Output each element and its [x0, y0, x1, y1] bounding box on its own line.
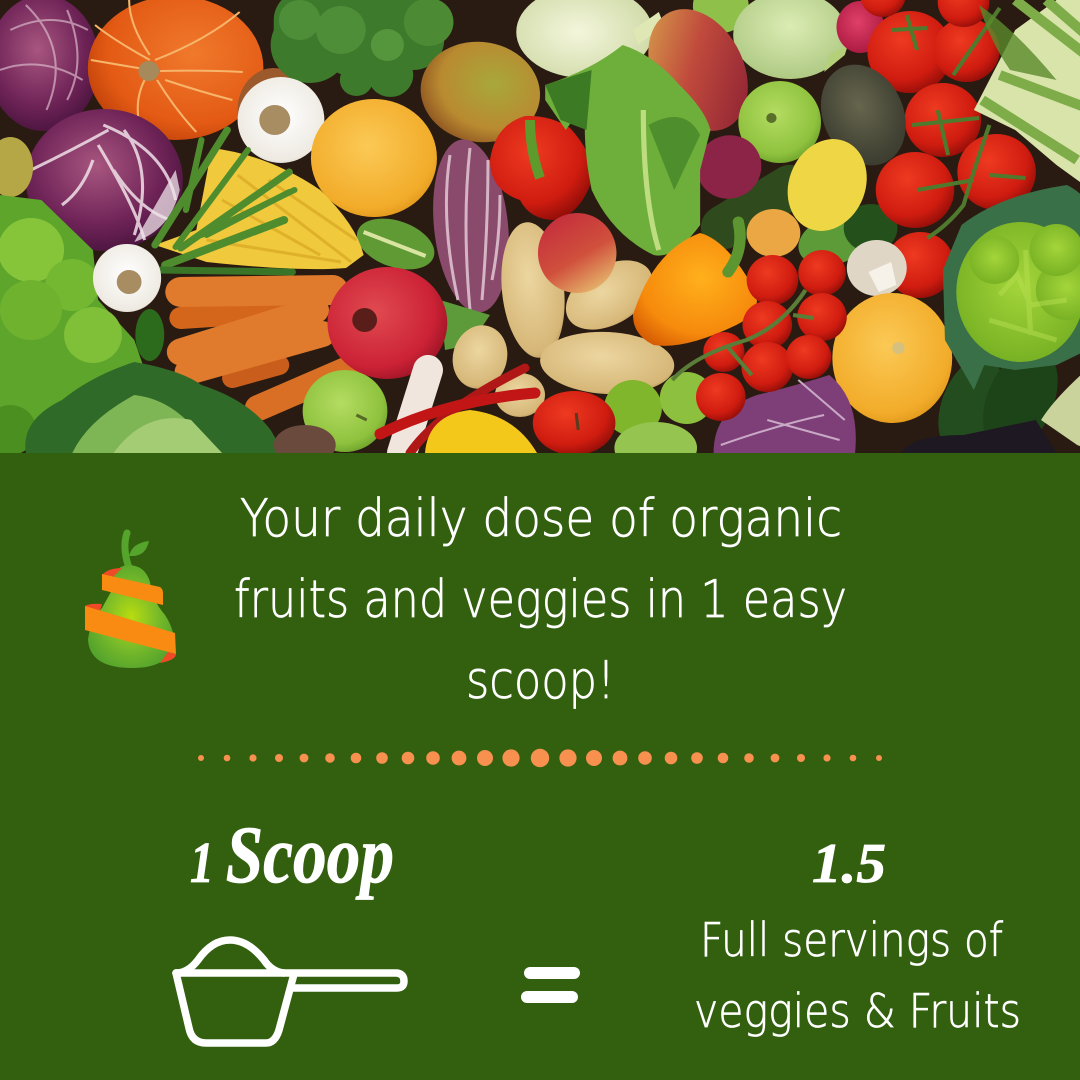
- pomegranate: [327, 267, 447, 379]
- heading: daily dose message: scoop!: [466, 651, 615, 711]
- limes: [604, 372, 714, 436]
- grapefruit: [311, 99, 437, 217]
- root vegetable bottom: [274, 425, 336, 465]
- radish: [836, 1, 884, 53]
- romanesco with leaves: [943, 185, 1080, 390]
- red onion: [685, 124, 773, 210]
- lettuce left: [0, 195, 164, 455]
- dotted divider: [198, 749, 882, 767]
- heading: daily dose message: [234, 489, 847, 711]
- red apple bottom: [533, 391, 615, 455]
- tomatoes top right: [860, 0, 1036, 298]
- white radish: [402, 370, 428, 453]
- fennel bulb top: [516, 0, 664, 78]
- purple radicchio bottom: [714, 375, 856, 453]
- orange bell pepper: [633, 222, 757, 346]
- garlic bulb top: [238, 77, 324, 163]
- kohlrabi: [733, 0, 848, 79]
- chili peppers: [380, 368, 535, 453]
- top lime: [693, 0, 749, 33]
- blush apple: [538, 213, 616, 293]
- vine stem: [672, 290, 814, 380]
- yellow pepper: [425, 410, 537, 453]
- apricot: [747, 209, 800, 257]
- photo: assorted fresh vegetables and fruits: [0, 0, 1080, 453]
- green beans: [155, 130, 294, 272]
- heading: daily dose message: Your daily dose of organic: [240, 489, 842, 549]
- potatoes right: [538, 246, 676, 397]
- tomato vines: [891, 8, 1026, 238]
- green cucumbers in the back: [692, 157, 1072, 463]
- icon: measuring scoop with powder: [176, 940, 404, 1043]
- potatoes left: [446, 219, 571, 417]
- green apple bottom: [303, 370, 387, 452]
- carrots: [181, 290, 346, 408]
- green apple center: [738, 81, 821, 163]
- cucumber small: [350, 209, 442, 279]
- fennel lower right: [1041, 360, 1080, 453]
- blush pear: [629, 0, 767, 147]
- garlic bulb lower: [93, 244, 161, 312]
- purple cabbage: [26, 109, 183, 251]
- large grapefruit: [832, 293, 952, 423]
- corn cobs: [155, 148, 364, 269]
- value: 1.5: 1.5: [812, 833, 886, 895]
- label: 1 Scoop: 1 Scoop: [190, 809, 394, 900]
- mushroom: [847, 240, 907, 296]
- pumpkin: [88, 0, 263, 140]
- text: full servings of veggies and fruits: Full servings of: [700, 913, 1004, 967]
- romaine lettuce: [545, 45, 710, 256]
- dark wooden backdrop: [0, 0, 1080, 453]
- equals sign: [521, 967, 580, 1003]
- striped eggplant: [425, 136, 517, 350]
- cherry tomatoes on the vine: [696, 250, 847, 421]
- text: full servings of veggies and fruits: [694, 913, 1021, 1038]
- broccoli: [271, 0, 453, 97]
- savoy cabbage: [25, 362, 284, 453]
- fennel right with stalks: [974, 0, 1080, 195]
- red bell pepper: [490, 116, 592, 220]
- mango: [412, 33, 548, 151]
- avocado: [806, 52, 921, 178]
- pear at left edge: [0, 137, 33, 197]
- green apple bottom edge: [614, 422, 697, 474]
- icon: pear wrapped with measuring tape: [85, 533, 176, 668]
- heading: daily dose message: fruits and veggies in 1 easy: [234, 570, 847, 630]
- radicchio top left: [0, 0, 99, 131]
- lemon: [775, 128, 880, 242]
- roasted brown root behind garlic: [238, 68, 310, 152]
- text: full servings of veggies and fruits: veggies & Fruits: [694, 984, 1021, 1038]
- dark eggplant bottom: [902, 420, 1057, 453]
